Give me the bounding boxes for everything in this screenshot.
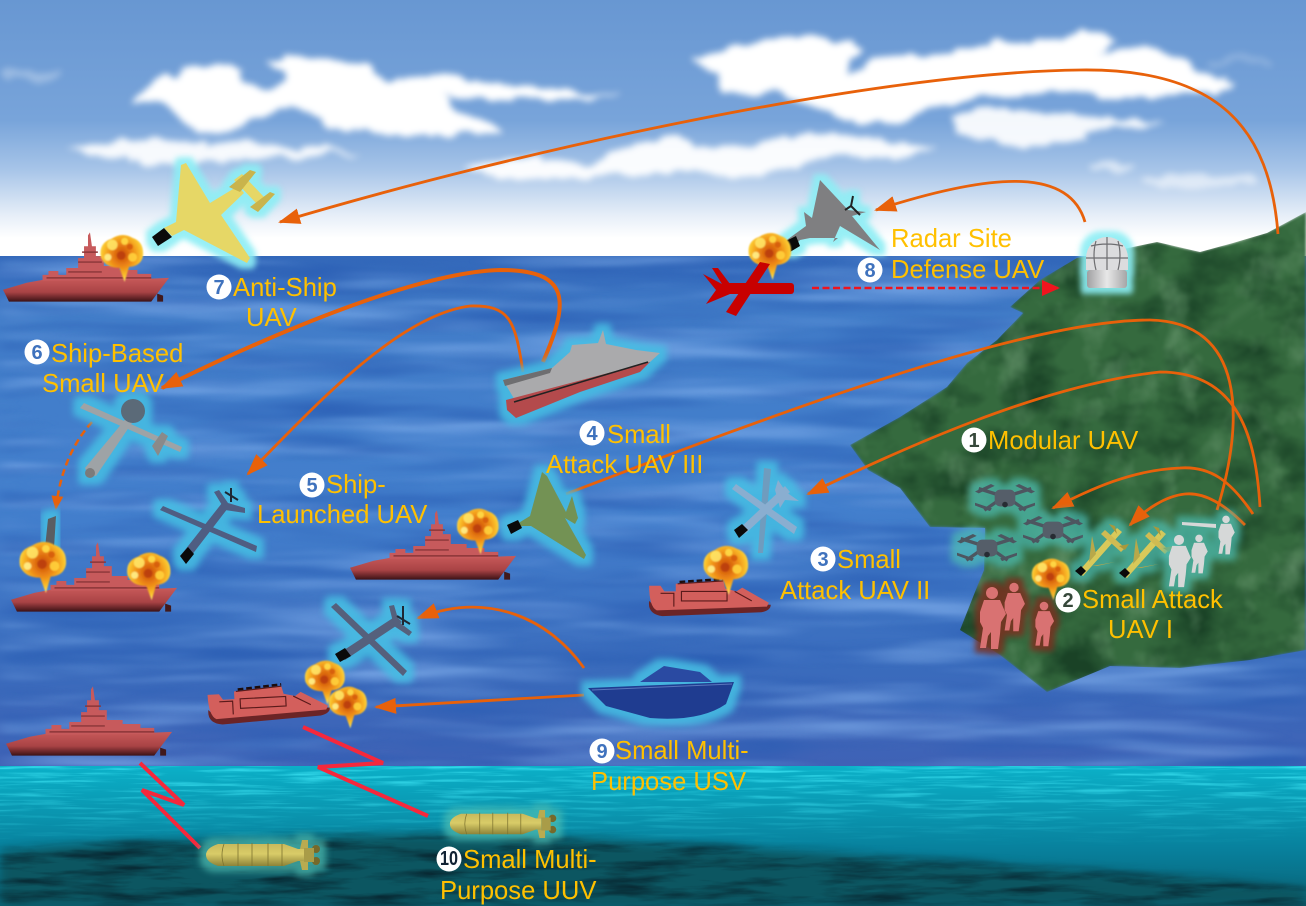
ship: center target [350,510,516,580]
fire: hovercraft [703,546,748,595]
arrow: land to small attack UAV II [808,372,1260,507]
clouds [0,30,1270,187]
label 9: 9 [596,741,608,763]
arrow: ship to ship-based UAV [162,270,560,388]
uav 6: ship-based [80,399,182,478]
ship: bottom target [6,686,172,756]
label 4: Small [607,421,671,449]
arrow: red dashed [812,287,1058,289]
background: underwater [0,766,1306,906]
uav 7: anti-ship [152,163,275,263]
ship: frigate [503,330,660,418]
arrow: land to small attack UAV III [566,320,1233,510]
munition [45,516,56,548]
label 5: Ship- [326,471,386,499]
radar dome [1086,237,1128,288]
arrow: ship to ship-launched UAV [248,306,523,474]
ship: top left target [3,232,169,302]
arrow: USV to UAV [418,607,584,668]
label 2: Small Attack [1082,586,1223,614]
label 8: Defense UAV [891,256,1044,284]
label 1: 1 [968,430,980,452]
label 1: Modular UAV [988,427,1138,455]
label 8 [858,225,1044,284]
label 3: 3 [817,549,829,571]
label 2: UAV I [1108,616,1173,644]
uuv 10 right [450,810,556,838]
hovercraft target 2 [207,682,331,725]
label 8: 8 [864,260,876,282]
arrow: radar to defense UAV [876,181,1085,222]
uav 4: small attack III [507,472,586,559]
hovercraft target [649,579,771,616]
label 6: Ship-Based [51,340,183,368]
label 5: Launched UAV [257,501,427,529]
drones: modular uav swarm [957,484,1083,561]
background: sea [0,256,1306,766]
label 7: Anti-Ship [233,274,337,302]
arrow: USV to hovercraft [376,695,584,707]
uav 3: small attack II [732,468,799,553]
label 9 [590,737,749,796]
label 6 [24,340,183,398]
friendly soldiers [1169,516,1235,587]
arrow: radar to anti-ship UAV [280,70,1278,234]
sea light streaks [0,256,1306,766]
label 2 [1056,586,1223,644]
label 3: Small [837,546,901,574]
label 6: Small UAV [42,370,164,398]
usv 9 [588,666,734,719]
fires: left ship [19,542,170,600]
label 10: Small Multi- [463,846,597,874]
label 4 [546,420,703,479]
label 4: Attack UAV III [546,451,703,479]
land ridge lines [1060,240,1270,500]
label 6: 6 [31,342,43,364]
background: sky [0,0,1306,256]
signal bolt left [140,763,200,848]
ship: left target 2 [11,542,177,612]
uav 8: radar site defense [784,180,880,252]
fire: land [1032,559,1070,600]
fire: red target [748,233,791,280]
uuv 10 left [206,840,320,870]
arrow: dashed munition drop [56,422,92,508]
sea dark streaks [0,256,1306,766]
label 9: Purpose USV [591,768,746,796]
label 7: UAV [246,304,297,332]
land [850,212,1306,692]
enemy soldiers [980,583,1054,649]
label 4: 4 [586,423,598,445]
signal bolt right [303,727,428,816]
label 2: 2 [1062,590,1074,612]
fire: top left ship [100,235,143,282]
label 8: Radar Site [891,225,1012,253]
red target drone [703,262,794,316]
label 7: 7 [213,277,225,299]
label 3: Attack UAV II [780,577,930,605]
fire: center ship [457,509,499,554]
arrow: land to small attack UAV I [1130,494,1245,525]
arrow: land to modular UAV [1053,468,1253,514]
fires: hovercraft 2 [305,661,367,728]
label 7 [206,274,337,332]
seabed [0,834,1306,906]
label 5 [257,471,427,529]
uav: USV launched [331,603,412,676]
underwater ripples [0,766,1306,846]
label 10: Purpose UUV [440,877,596,905]
label 9: Small Multi- [615,737,749,765]
label 10: 10 [440,848,458,870]
label 3 [780,546,930,605]
label 10 [436,846,597,905]
uav 5: ship-launched [160,488,257,564]
darts: small attack uav I [1075,524,1173,578]
label 5: 5 [306,475,318,497]
